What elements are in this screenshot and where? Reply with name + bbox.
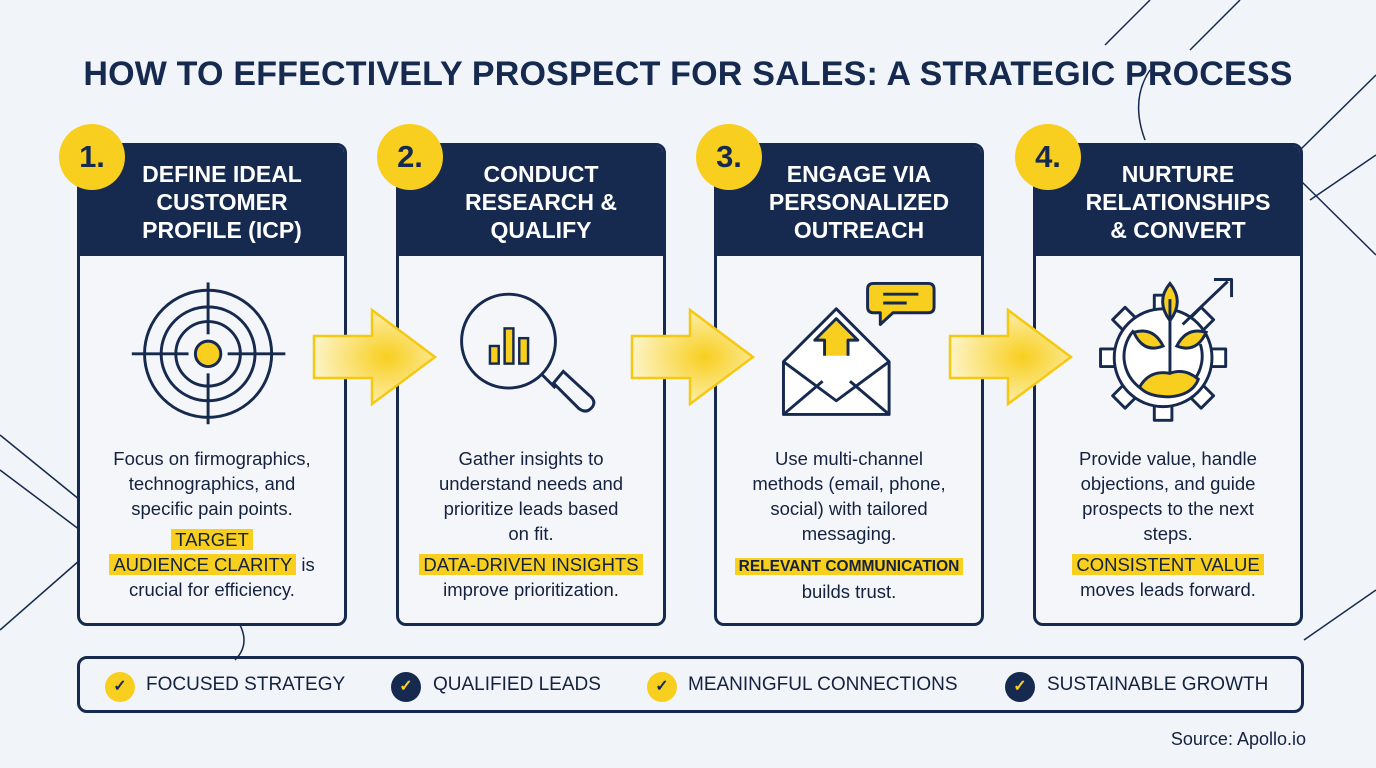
- icon: envelope: [782, 282, 936, 416]
- panel: step 2: [396, 143, 666, 626]
- heading: step 2: RESEARCH &: [465, 189, 617, 215]
- text: step 1: specific pain points.: [131, 498, 293, 519]
- panel: step 3: [714, 143, 984, 626]
- text: step 1: crucial for efficiency.: [129, 579, 295, 600]
- badge: 4: 4.: [1035, 139, 1061, 174]
- text: step 4: steps.: [1143, 523, 1193, 544]
- heading: step 3: PERSONALIZED: [769, 189, 949, 215]
- text: step 3: messaging.: [802, 523, 896, 544]
- text: step 3: Use multi-channel: [775, 448, 923, 469]
- text: step 3: builds trust.: [802, 581, 896, 602]
- panel: step 4: [1033, 143, 1303, 626]
- heading: step 2: CONDUCT: [484, 161, 598, 187]
- text: step 2: prioritize leads based: [444, 498, 618, 519]
- text: step 4: CONSISTENT VALUE: [1076, 554, 1260, 575]
- text: step 1: AUDIENCE CLARITY is: [113, 554, 315, 575]
- text: step 1: Focus on firmographics,: [113, 448, 311, 469]
- heading: step 4: NURTURE: [1122, 161, 1234, 187]
- text: step 2: understand needs and: [439, 473, 623, 494]
- source: Source: Apollo.io: [1171, 729, 1306, 749]
- badge: 1: 1.: [79, 139, 105, 174]
- benefits bar: SUSTAINABLE GROWTH: [1047, 674, 1268, 695]
- item: focused strategy: [105, 672, 345, 702]
- benefits bar: ✓: [1013, 678, 1027, 695]
- text: step 2: on fit.: [508, 523, 554, 544]
- text: step 4: [1072, 448, 1264, 600]
- badge: 2: 2.: [397, 139, 423, 174]
- text: step 1: TARGET: [175, 529, 249, 550]
- text: step 4: Provide value, handle: [1079, 448, 1257, 469]
- text: step 3: methods (email, phone,: [752, 473, 946, 494]
- text: step 3: RELEVANT COMMUNICATION: [739, 558, 959, 575]
- icon: gear plant: [1099, 278, 1234, 422]
- benefits bar: FOCUSED STRATEGY: [146, 674, 345, 695]
- badge: 2: [377, 124, 443, 190]
- text: step 4: moves leads forward.: [1080, 579, 1256, 600]
- heading: step 1: PROFILE (ICP): [142, 217, 302, 243]
- heading: step 1: CUSTOMER: [156, 189, 288, 215]
- text: step 4: objections, and guide: [1081, 473, 1255, 494]
- benefits bar: ✓: [399, 678, 413, 695]
- benefits bar: ✓: [655, 678, 669, 695]
- text: step 3: [735, 448, 963, 602]
- heading: step 3: ENGAGE VIA: [787, 161, 931, 187]
- item: sustainable growth: [1005, 672, 1268, 702]
- benefits bar: [77, 656, 1304, 713]
- heading: step 2: QUALIFY: [491, 217, 591, 243]
- heading: step 1: [80, 146, 344, 256]
- badge: 3: 3.: [716, 139, 742, 174]
- heading: step 2: [399, 146, 663, 256]
- benefits bar: QUALIFIED LEADS: [433, 674, 601, 695]
- heading: step 4: & CONVERT: [1110, 217, 1246, 243]
- panel: step 1: [77, 143, 347, 626]
- benefits bar: MEANINGFUL CONNECTIONS: [688, 674, 958, 695]
- text: step 2: DATA-DRIVEN INSIGHTS: [423, 554, 639, 575]
- text: step 2: Gather insights to: [458, 448, 604, 469]
- heading: step 4: [1036, 146, 1300, 256]
- benefits bar: ✓: [113, 678, 127, 695]
- text: step 3: social) with tailored: [770, 498, 928, 519]
- text: step 2: [419, 448, 643, 600]
- heading: step 1: DEFINE IDEAL: [142, 161, 302, 187]
- badge: 1: [59, 124, 125, 190]
- item: qualified leads: [391, 672, 601, 702]
- text: step 1: technographics, and: [129, 473, 295, 494]
- badge: 4: [1015, 124, 1081, 190]
- icon: target: [132, 282, 286, 424]
- text: step 4: prospects to the next: [1082, 498, 1254, 519]
- heading: step 4: RELATIONSHIPS: [1086, 189, 1270, 215]
- text: step 1: [109, 448, 315, 600]
- text: step 2: improve prioritization.: [443, 579, 619, 600]
- title: HOW TO EFFECTIVELY PROSPECT FOR SALES: A STRATEGIC PROCESS: [83, 55, 1293, 93]
- heading: step 3: OUTREACH: [794, 217, 924, 243]
- icon: magnifier chart: [460, 292, 596, 413]
- item: meaningful connections: [647, 672, 958, 702]
- heading: step 3: [717, 146, 981, 256]
- badge: 3: [696, 124, 762, 190]
